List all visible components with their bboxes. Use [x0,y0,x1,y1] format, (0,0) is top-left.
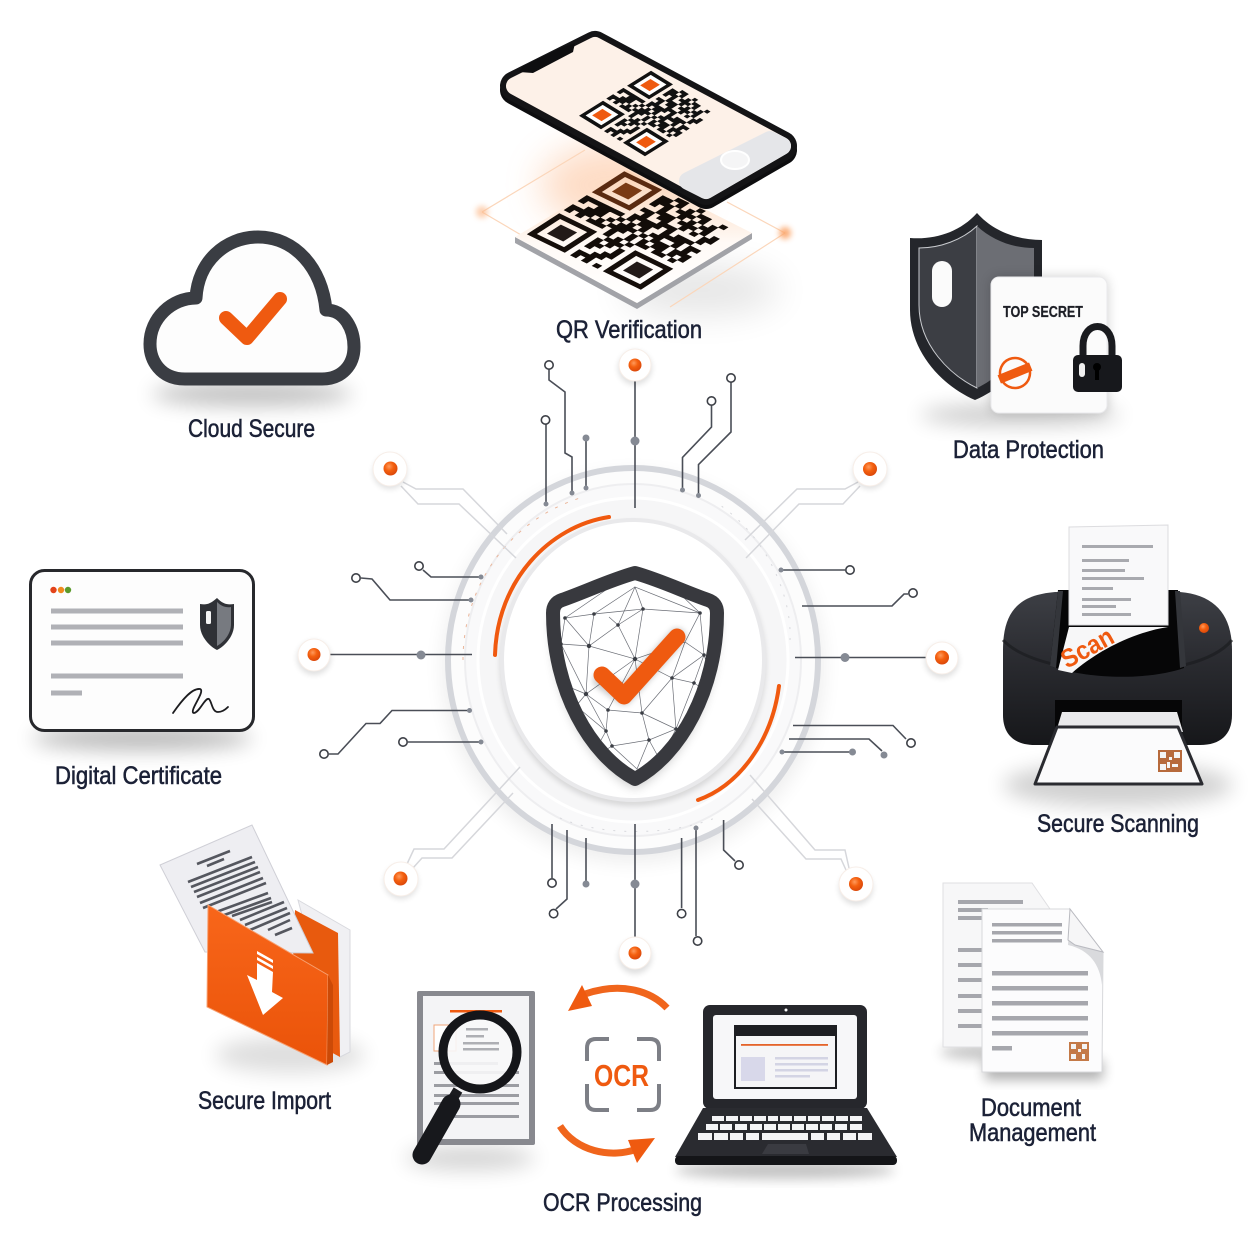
arrow: lower forward [560,1126,655,1163]
keyboard [698,1116,872,1140]
icon: central shield with check [552,570,720,787]
panel: Data Protection [910,213,1122,464]
hub rings [443,468,823,862]
phone [515,43,782,194]
label: Data Protection: Data Protection [953,436,1104,464]
icon: cloud with check [150,237,354,406]
text: TOP SECRET: TOP SECRET [1003,304,1083,321]
document QR [1069,1042,1089,1061]
icon: printer [1003,525,1233,807]
orange arc: upper left [495,517,609,655]
circuit dots: hollow terminals [320,361,917,945]
icon: padlock [1073,326,1122,392]
stamp [994,353,1036,393]
label: QR Verification: QR Verification [556,316,702,344]
label: Document Management: Document [981,1094,1081,1122]
icon: dark shield [910,213,1120,425]
panel: central security hub [297,349,959,974]
output tray [1035,700,1202,784]
signature [173,689,228,713]
window dots [50,587,71,593]
icon: laptop [675,1005,897,1179]
panel: Cloud Secure [150,237,354,443]
paper [160,825,313,953]
check mark [602,637,677,696]
pale dashed arcs [463,498,790,832]
orange nodes [297,349,959,974]
arrow [247,951,283,1015]
panel: Secure Import [160,825,365,1115]
icon: document with magnifier [405,991,535,1170]
tray QR [1158,750,1182,772]
text lines [51,608,183,696]
label: Secure Scanning: Secure Scanning [1037,810,1199,838]
front document [982,909,1103,1080]
certificate card [30,570,254,750]
scanned page [1055,525,1168,674]
icon: folder with document [160,825,365,1073]
panel: OCR Processing [405,985,897,1217]
text: OCR: OCR [594,1058,649,1093]
label: Digital Certificate: Digital Certificate [55,762,222,790]
arrow: upper return [568,985,667,1011]
label: Cloud Secure: Cloud Secure [188,415,315,443]
circuit lines: dark traces [314,365,942,953]
phone QR code [581,72,715,155]
document: top secret [991,277,1122,413]
circuit dots: gray [416,434,888,888]
orange arc: lower right [698,686,779,800]
OCR scan frame [587,1039,659,1110]
shield mesh [562,586,706,770]
plate glow and connector lines [476,143,791,314]
QR plate [515,170,752,309]
back document [940,883,1060,1061]
panel: QR Verification [476,43,791,344]
folder front [207,905,328,1065]
phone notch [519,43,575,73]
label: Document Management: Management [969,1119,1096,1147]
magnifier [422,1015,517,1155]
icon: small shield [200,598,234,650]
label: OCR Processing: OCR Processing [543,1189,702,1217]
label: Document Management [969,1094,1096,1147]
panel: Digital Certificate [30,570,254,790]
circuit lines: light traces to corner nodes [401,482,860,870]
label: Secure Import: Secure Import [198,1087,331,1115]
panel: Secure Scanning [1003,525,1233,838]
panel: Document Management [940,883,1103,1147]
text: Scan: Scan [1055,621,1119,674]
